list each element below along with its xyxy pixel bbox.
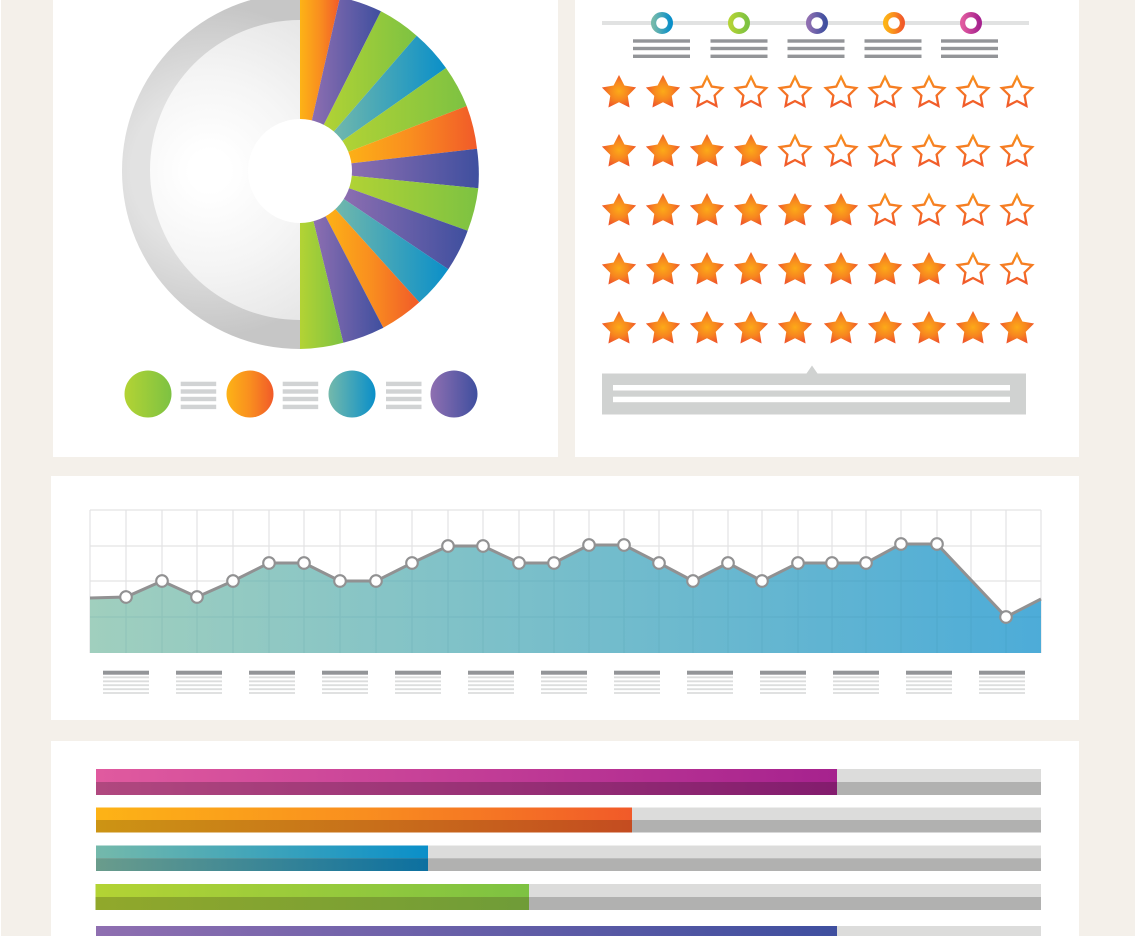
star row: 2 of 10 [602, 75, 1032, 108]
star row: 6 of 10 [602, 193, 1032, 226]
donut: centre hole [248, 119, 352, 223]
donut: grey left half ring [122, 0, 300, 349]
panel: progress bars [51, 741, 1079, 936]
callout box [602, 366, 1026, 414]
data point markers [120, 538, 1012, 623]
bar: magenta [96, 769, 1041, 795]
area fill [90, 544, 1041, 653]
bar: teal [96, 846, 1041, 871]
donut: light inner disc [150, 20, 300, 320]
star row: 8 of 10 [602, 252, 1032, 285]
bar: orange [96, 808, 1041, 832]
panel: donut chart [53, 0, 558, 457]
bar: green [96, 884, 1041, 910]
star row: 4 of 10 [602, 134, 1032, 167]
bar: purple [96, 926, 1041, 936]
timeline placeholder text lines [633, 39, 998, 58]
panel: area line chart [51, 476, 1079, 720]
panel: star ratings [575, 0, 1079, 457]
data line [90, 544, 1041, 617]
timeline with ring markers [602, 15, 1029, 31]
donut: coloured slices [300, 0, 479, 349]
axis placeholder labels [103, 671, 1025, 693]
legend: coloured dots and placeholder lines [124, 370, 478, 418]
star row: 10 of 10 [602, 311, 1034, 344]
